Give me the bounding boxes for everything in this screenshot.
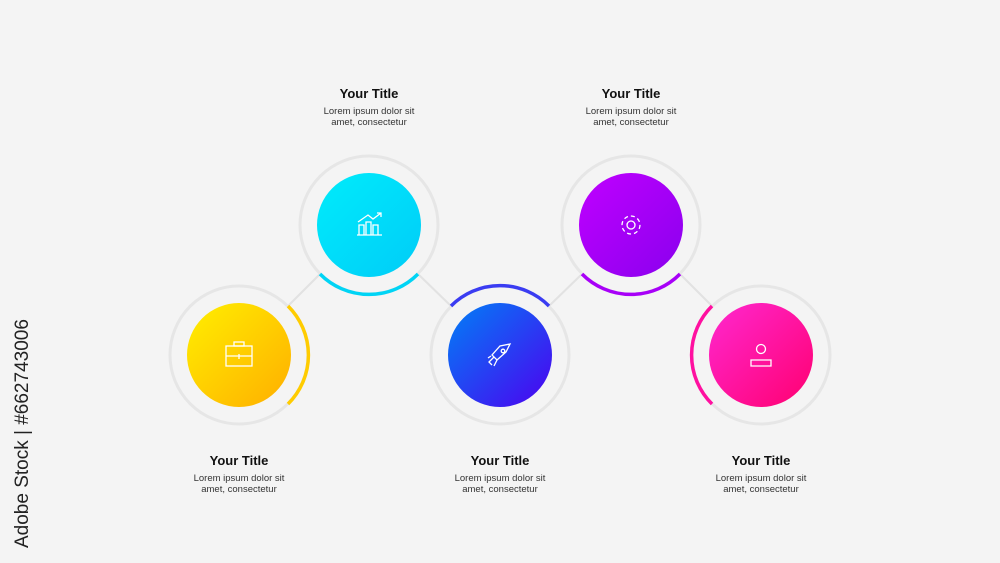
text step 1: Your Title [210,453,268,468]
step 1 circle [170,286,308,424]
text step 4: Your Title [602,86,660,101]
text step 2: amet, consectetur [331,117,407,128]
step 5 circle [692,286,830,424]
text step 3: Your Title [471,453,529,468]
text step 2 [324,86,414,128]
side caption: Adobe Stock | #662743006 [12,319,33,548]
text step 1: amet, consectetur [201,484,277,495]
step 3 circle [431,286,569,424]
text step 3 [455,453,546,495]
text step 4: amet, consectetur [593,117,669,128]
connectors [288,274,712,306]
text step 2: Lorem ipsum dolor sit [324,106,414,117]
step 4 circle [562,156,700,294]
text step 1 [194,453,284,495]
text step 2: Your Title [340,86,398,101]
text step 5: amet, consectetur [723,484,799,495]
text step 5: Your Title [732,453,790,468]
text step 3: amet, consectetur [462,484,538,495]
text step 1: Lorem ipsum dolor sit [194,473,284,484]
text step 4 [586,86,676,128]
text step 5: Lorem ipsum dolor sit [716,473,806,484]
text step 5 [716,453,806,495]
text step 3: Lorem ipsum dolor sit [455,473,545,484]
text step 4: Lorem ipsum dolor sit [586,106,676,117]
step 2 circle [300,156,438,294]
